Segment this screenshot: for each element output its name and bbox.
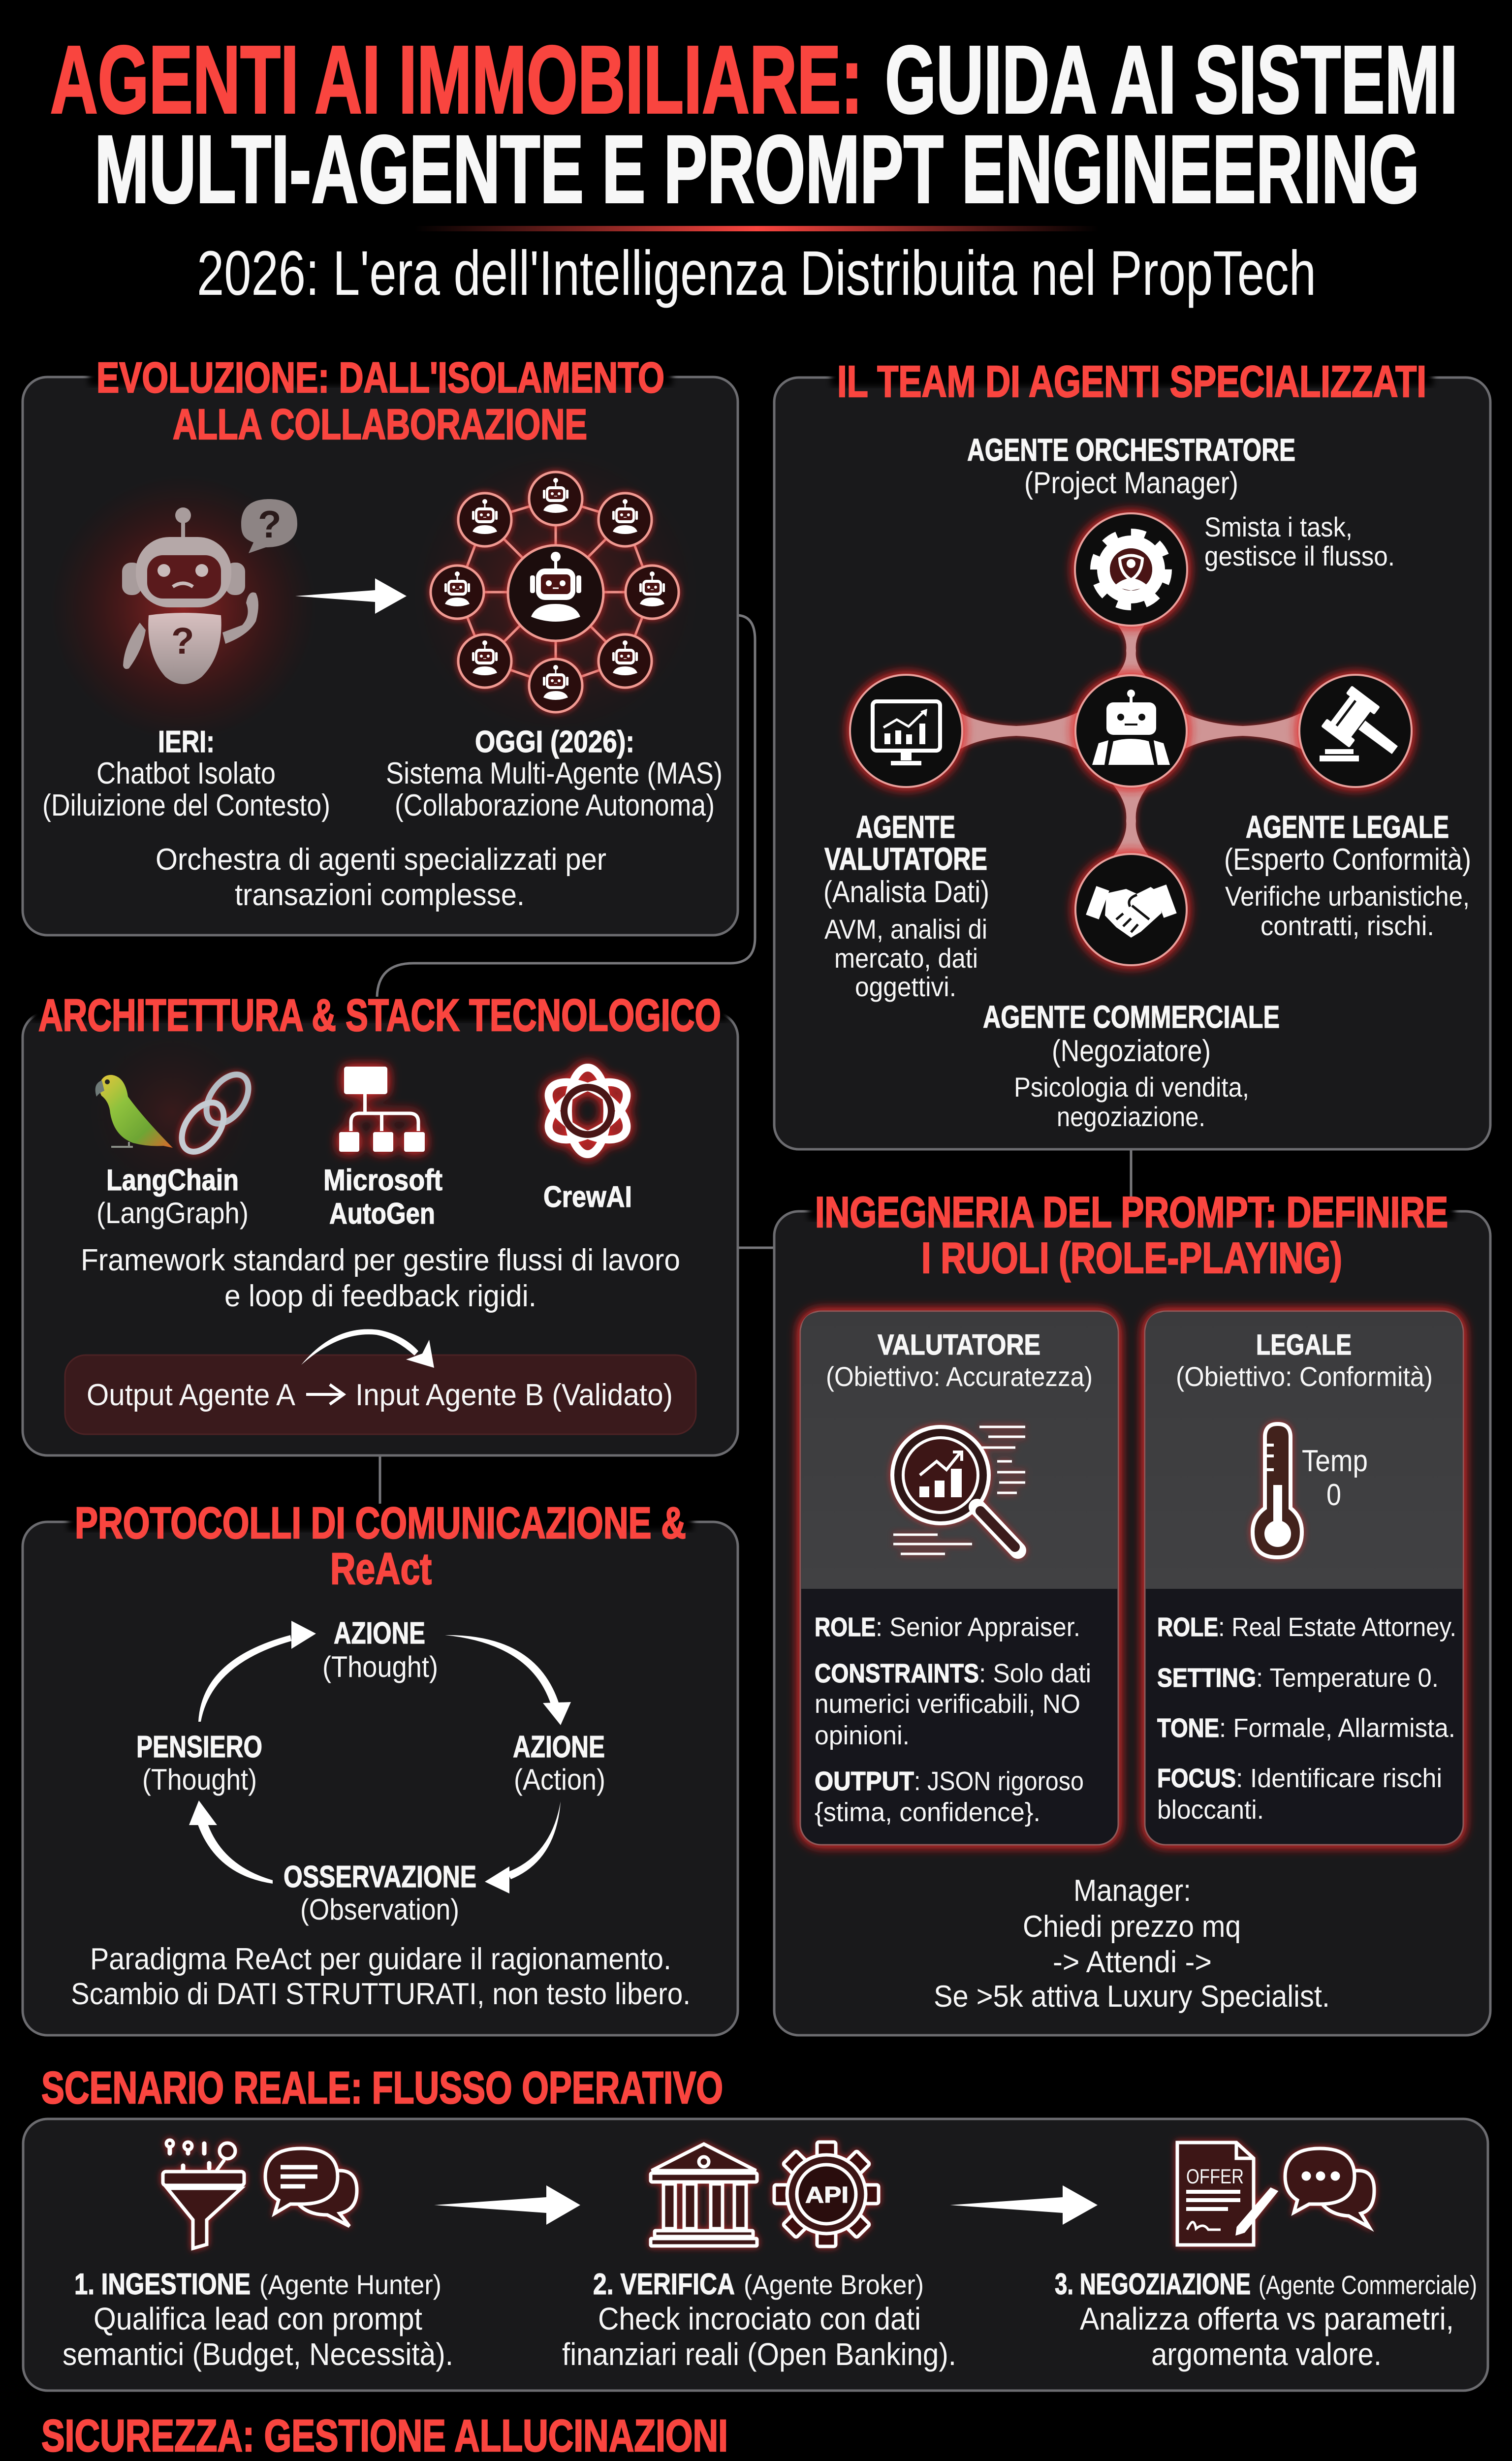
text: crewai: CrewAI (543, 1180, 632, 1213)
card: valutatore: VALUTATORE (878, 1329, 1040, 1361)
text: legale role: : Identificare rischi (1236, 1764, 1442, 1793)
text: manager: Chiedi prezzo mq (1023, 1910, 1241, 1944)
heading: evoluzione: EVOLUZIONE: DALL'ISOLAMENTO (96, 354, 664, 402)
text: valutatore: mercato, dati (834, 943, 978, 974)
text: legale role: SETTING (1157, 1663, 1256, 1693)
title (50, 26, 1458, 223)
text: legale role: : Temperature 0. (1256, 1663, 1439, 1693)
text: valutatore (823, 809, 989, 1002)
text: azione thought: AZIONE (334, 1616, 425, 1650)
icon: central robot (1092, 690, 1170, 765)
text: oggi: OGGI (2026): (475, 725, 634, 759)
text: step 3: argomenta valore. (1151, 2336, 1382, 2372)
text: valutatore role (815, 1612, 1091, 1827)
text: pensiero (136, 1730, 262, 1796)
text: framework: Framework standard per gestire flussi di lavoro (81, 1243, 680, 1277)
panel: scenario (23, 2119, 1488, 2391)
callout: output to input (65, 1329, 696, 1434)
text: valutatore role: opinioni. (815, 1721, 910, 1750)
text: step 1: 1. INGESTIONE (74, 2268, 251, 2301)
arrow: react loop (189, 1621, 571, 1893)
text: valutatore role: numerici verificabili, NO (815, 1689, 1080, 1719)
heading: ingegneria (808, 1188, 1455, 1282)
text: valutatore role: OUTPUT (815, 1767, 914, 1796)
text: temp 0: 0 (1326, 1478, 1341, 1512)
panel: ingegneria del prompt (774, 1188, 1490, 2035)
panel: protocolli (23, 1499, 738, 2035)
panel: team (774, 357, 1490, 1149)
arrow: flow 2 (950, 2185, 1098, 2225)
text: pensiero: (Thought) (142, 1763, 257, 1796)
heading: sicurezza: SICUREZZA: GESTIONE ALLUCINAZIONI (41, 2411, 728, 2461)
text: temp 0: Temp (1302, 1444, 1368, 1478)
text: orchestra (156, 843, 606, 912)
card: legale (1145, 1311, 1463, 1845)
card: valutatore (800, 1311, 1118, 1845)
text: step 1: semantici (Budget, Necessità). (63, 2336, 453, 2372)
text: ieri: IERI: (158, 725, 215, 759)
heading: ingegneria: I RUOLI (ROLE-PLAYING) (921, 1233, 1342, 1282)
text: valutatore role: : JSON rigoroso (914, 1767, 1084, 1796)
icon: gavel (1320, 686, 1398, 761)
text: api: API (805, 2182, 849, 2208)
text: valutatore: AVM, analisi di (824, 914, 987, 945)
icon: isolated chatbot: ? (258, 503, 282, 546)
text: step 1: (Agente Hunter) (259, 2269, 441, 2300)
icon: crewai knot (539, 1068, 636, 1154)
text: ieri: (Diluizione del Contesto) (42, 789, 330, 822)
text: step 3 (1055, 2268, 1477, 2372)
icon: orchestrator gear (1096, 534, 1166, 605)
icon: isolated chatbot: ? (171, 620, 194, 662)
icon: valuation monitor (873, 701, 940, 765)
text: valutatore: AGENTE (856, 809, 955, 845)
text: oggi: (Collaborazione Autonoma) (395, 789, 715, 822)
text: offer: OFFER (1186, 2165, 1244, 2188)
icon: isolated chatbot (50, 475, 316, 741)
text: temp 0 (1302, 1444, 1368, 1512)
text: azione action: (Action) (514, 1763, 605, 1796)
text: valutatore role: CONSTRAINTS (815, 1659, 979, 1688)
text: framework (81, 1243, 680, 1313)
text: legale role: : Real Estate Attorney. (1218, 1612, 1456, 1642)
panel: architettura (23, 990, 738, 1455)
text: orchestra: transazioni complesse. (235, 878, 525, 912)
text: step 1 (63, 2268, 453, 2372)
arrow: validation curve (301, 1329, 434, 1368)
card: legale: LEGALE (1256, 1329, 1352, 1361)
text: langchain: LangChain (106, 1164, 239, 1197)
card: legale: (Obiettivo: Conformità) (1176, 1361, 1433, 1392)
text: autogen (323, 1164, 442, 1230)
text: step 2 (562, 2268, 956, 2372)
text: step 2: 2. VERIFICA (593, 2268, 735, 2301)
text: valutatore role: : Solo dati (979, 1659, 1091, 1688)
text: step 3: Analizza offerta vs parametri, (1080, 2301, 1454, 2336)
text: valutatore: oggettivi. (855, 971, 956, 1002)
callout: output to input: Input Agente B (Validato) (355, 1378, 673, 1412)
text: orchestratore: AGENTE ORCHESTRATORE (967, 432, 1295, 468)
text: valutatore: (Analista Dati) (823, 875, 989, 909)
text: azione action (513, 1730, 605, 1796)
text: commerciale: AGENTE COMMERCIALE (983, 999, 1280, 1035)
text: legale: contratti, rischi. (1260, 910, 1434, 941)
text: commerciale: (Negoziatore) (1052, 1034, 1211, 1068)
text: orchestratore: gestisce il flusso. (1204, 540, 1395, 571)
connector: evoluzione to architettura (377, 615, 755, 997)
heading: evoluzione (89, 354, 672, 448)
heading: scenario reale: SCENARIO REALE: FLUSSO OPERATIVO (41, 2063, 723, 2113)
panel: evoluzione (23, 354, 738, 935)
text: commerciale (983, 999, 1280, 1132)
text: autogen: AutoGen (329, 1197, 435, 1230)
text: orchestratore: (Project Manager) (1024, 466, 1238, 500)
text: ieri (42, 725, 330, 822)
text: orchestra: Orchestra di agenti specializzati per (156, 843, 606, 877)
text: step 2: (Agente Broker) (744, 2269, 924, 2300)
text: osservazione: (Observation) (300, 1893, 459, 1926)
connector: architettura to protocolli (379, 1455, 381, 1504)
icon: langchain parrot and chain (89, 1029, 257, 1196)
heading: protocolli: PROTOCOLLI DI COMUNICAZIONE & (75, 1499, 686, 1548)
text: legale role (1157, 1612, 1456, 1825)
text: commerciale: Psicologia di vendita, (1014, 1072, 1249, 1103)
text: paradigma (71, 1942, 691, 2011)
text: valutatore role: {stima, confidence}. (815, 1798, 1040, 1827)
text: step 1: Qualifica lead con prompt (94, 2301, 422, 2336)
heading: protocolli: ReAct (330, 1545, 432, 1594)
text: manager: Se >5k attiva Luxury Specialist. (934, 1980, 1330, 2014)
text: step 3: 3. NEGOZIAZIONE (1055, 2268, 1251, 2301)
icon: handshake (1086, 884, 1177, 938)
text: legale: Verifiche urbanistiche, (1225, 881, 1470, 912)
card: valutatore: (Obiettivo: Accuratezza) (826, 1361, 1093, 1392)
title: AGENTI AI IMMOBILIARE: (50, 26, 863, 133)
connector: team to ingegneria (1130, 1149, 1132, 1201)
text: legale role: bloccanti. (1157, 1795, 1264, 1825)
icon: autogen org chart (339, 1067, 425, 1152)
text: legale role: : Formale, Allarmista. (1219, 1713, 1455, 1743)
text: valutatore role: : Senior Appraiser. (876, 1612, 1080, 1642)
text: step 2: finanziari reali (Open Banking). (562, 2336, 956, 2372)
text: legale: (Esperto Conformità) (1224, 843, 1471, 877)
text: pensiero: PENSIERO (136, 1730, 262, 1764)
text: paradigma: Paradigma ReAct per guidare il ragionamento. (90, 1942, 671, 1976)
text: step 2: Check incrociato con dati (598, 2301, 921, 2336)
text: legale (1224, 809, 1471, 941)
text: oggi: Sistema Multi-Agente (MAS) (386, 757, 723, 790)
text: langchain: (LangGraph) (96, 1197, 249, 1230)
text: azione action: AZIONE (513, 1730, 605, 1764)
text: paradigma: Scambio di DATI STRUTTURATI, non testo libero. (71, 1977, 691, 2011)
text: manager: -> Attendi -> (1053, 1945, 1212, 1979)
text: orchestratore: Smista i task, (1204, 511, 1353, 542)
text: valutatore: VALUTATORE (824, 841, 987, 877)
text: manager: Manager: (1073, 1874, 1191, 1908)
arrow: evolution (295, 578, 407, 614)
text: orchestratore (967, 432, 1395, 571)
heading: protocolli (68, 1499, 693, 1594)
icon: multi-agent network (413, 450, 698, 736)
text: framework: e loop di feedback rigidi. (224, 1279, 536, 1313)
connector: architettura to ingegneria (738, 1246, 774, 1249)
text: legale role: TONE (1157, 1713, 1219, 1743)
text: osservazione (284, 1860, 476, 1926)
heading: architettura: ARCHITETTURA & STACK TECNOLOGICO (38, 990, 721, 1041)
text: azione thought: (Thought) (322, 1650, 438, 1683)
icon: bank and api gear (651, 2142, 879, 2246)
text: langchain (96, 1164, 249, 1230)
text: oggi (386, 725, 723, 822)
heading: evoluzione: ALLA COLLABORAZIONE (173, 401, 587, 448)
text: valutatore role: ROLE (815, 1612, 876, 1642)
hub connectors (957, 618, 1304, 859)
icon: offer document and chat (1177, 2143, 1374, 2245)
arrow: flow 1 (434, 2185, 580, 2225)
text: autogen: Microsoft (323, 1164, 442, 1197)
icon: thermometer (1253, 1424, 1302, 1557)
text: ieri: Chatbot Isolato (96, 757, 276, 790)
icon: funnel and chat (163, 2140, 357, 2248)
text: osservazione: OSSERVAZIONE (284, 1860, 476, 1894)
text: azione thought (322, 1616, 438, 1683)
text: commerciale: negoziazione. (1057, 1101, 1205, 1132)
text: legale: AGENTE LEGALE (1246, 809, 1449, 845)
callout: output to input: Output Agente A (87, 1378, 296, 1412)
text: legale role: ROLE (1157, 1612, 1218, 1642)
text: legale role: FOCUS (1157, 1764, 1236, 1793)
text: manager (934, 1874, 1330, 2014)
icon: magnifier chart (892, 1427, 1025, 1554)
